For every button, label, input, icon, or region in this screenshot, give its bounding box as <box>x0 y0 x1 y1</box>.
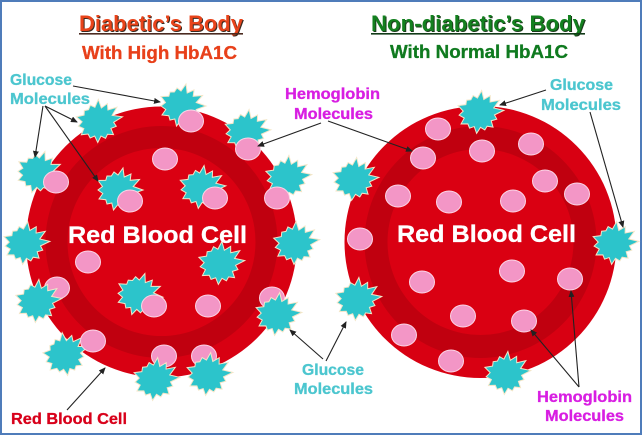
arrows: glucose, top left <box>35 86 160 181</box>
label: glucose molecules, top left: Glucose <box>10 72 72 89</box>
glucose molecules above hemoglobin <box>3 95 323 402</box>
hemoglobin molecules <box>348 118 590 372</box>
label: hemoglobin molecules, bottom right: Hemoglobin <box>537 389 632 406</box>
title: non-diabetic's body: Non-diabetic’s Body <box>371 11 586 36</box>
arrows: hemoglobin, bottom right <box>531 291 579 387</box>
hemoglobin molecules <box>44 110 290 367</box>
label: hemoglobin molecules, centre: Molecules <box>294 106 373 123</box>
label: glucose molecules, bottom centre: Molecules <box>294 381 373 398</box>
title: diabetic's body: Diabetic’s Body <box>79 11 244 36</box>
arrows: hemoglobin, centre <box>258 121 412 151</box>
subtitle: with high HbA1C: With High HbA1C <box>82 43 237 63</box>
glucose molecules beneath hemoglobin <box>16 84 315 381</box>
panel: non-diabetic's red blood cell <box>332 89 641 397</box>
label: red blood cell, bottom left: Red Blood Cell <box>11 411 127 428</box>
arrow: red blood cell <box>67 368 105 410</box>
label: red blood cell: Red Blood Cell <box>397 221 576 248</box>
title: non-diabetic's body: Non-diabetic’s Body <box>372 12 587 37</box>
label: glucose molecules, top left: Molecules <box>10 91 90 108</box>
label: hemoglobin molecules, bottom right: Molecules <box>545 408 624 425</box>
glucose molecules <box>332 89 641 397</box>
panel: diabetic's red blood cell <box>3 84 323 402</box>
title: diabetic's body: Diabetic’s Body <box>80 12 245 37</box>
label: hemoglobin molecules, centre: Hemoglobin <box>285 86 380 103</box>
cell body: non-diabetic <box>344 106 616 378</box>
label: glucose molecules, bottom centre: Glucose <box>302 362 364 379</box>
arrows: glucose, bottom centre <box>290 322 346 361</box>
subtitle: with normal HbA1C: With Normal HbA1C <box>390 42 568 62</box>
label: red blood cell: Red Blood Cell <box>68 222 247 249</box>
cell body: diabetic <box>26 106 297 378</box>
arrows: glucose, top right <box>500 90 623 227</box>
label: glucose molecules, top right: Glucose <box>550 77 613 94</box>
label: glucose molecules, top right: Molecules <box>541 97 621 114</box>
